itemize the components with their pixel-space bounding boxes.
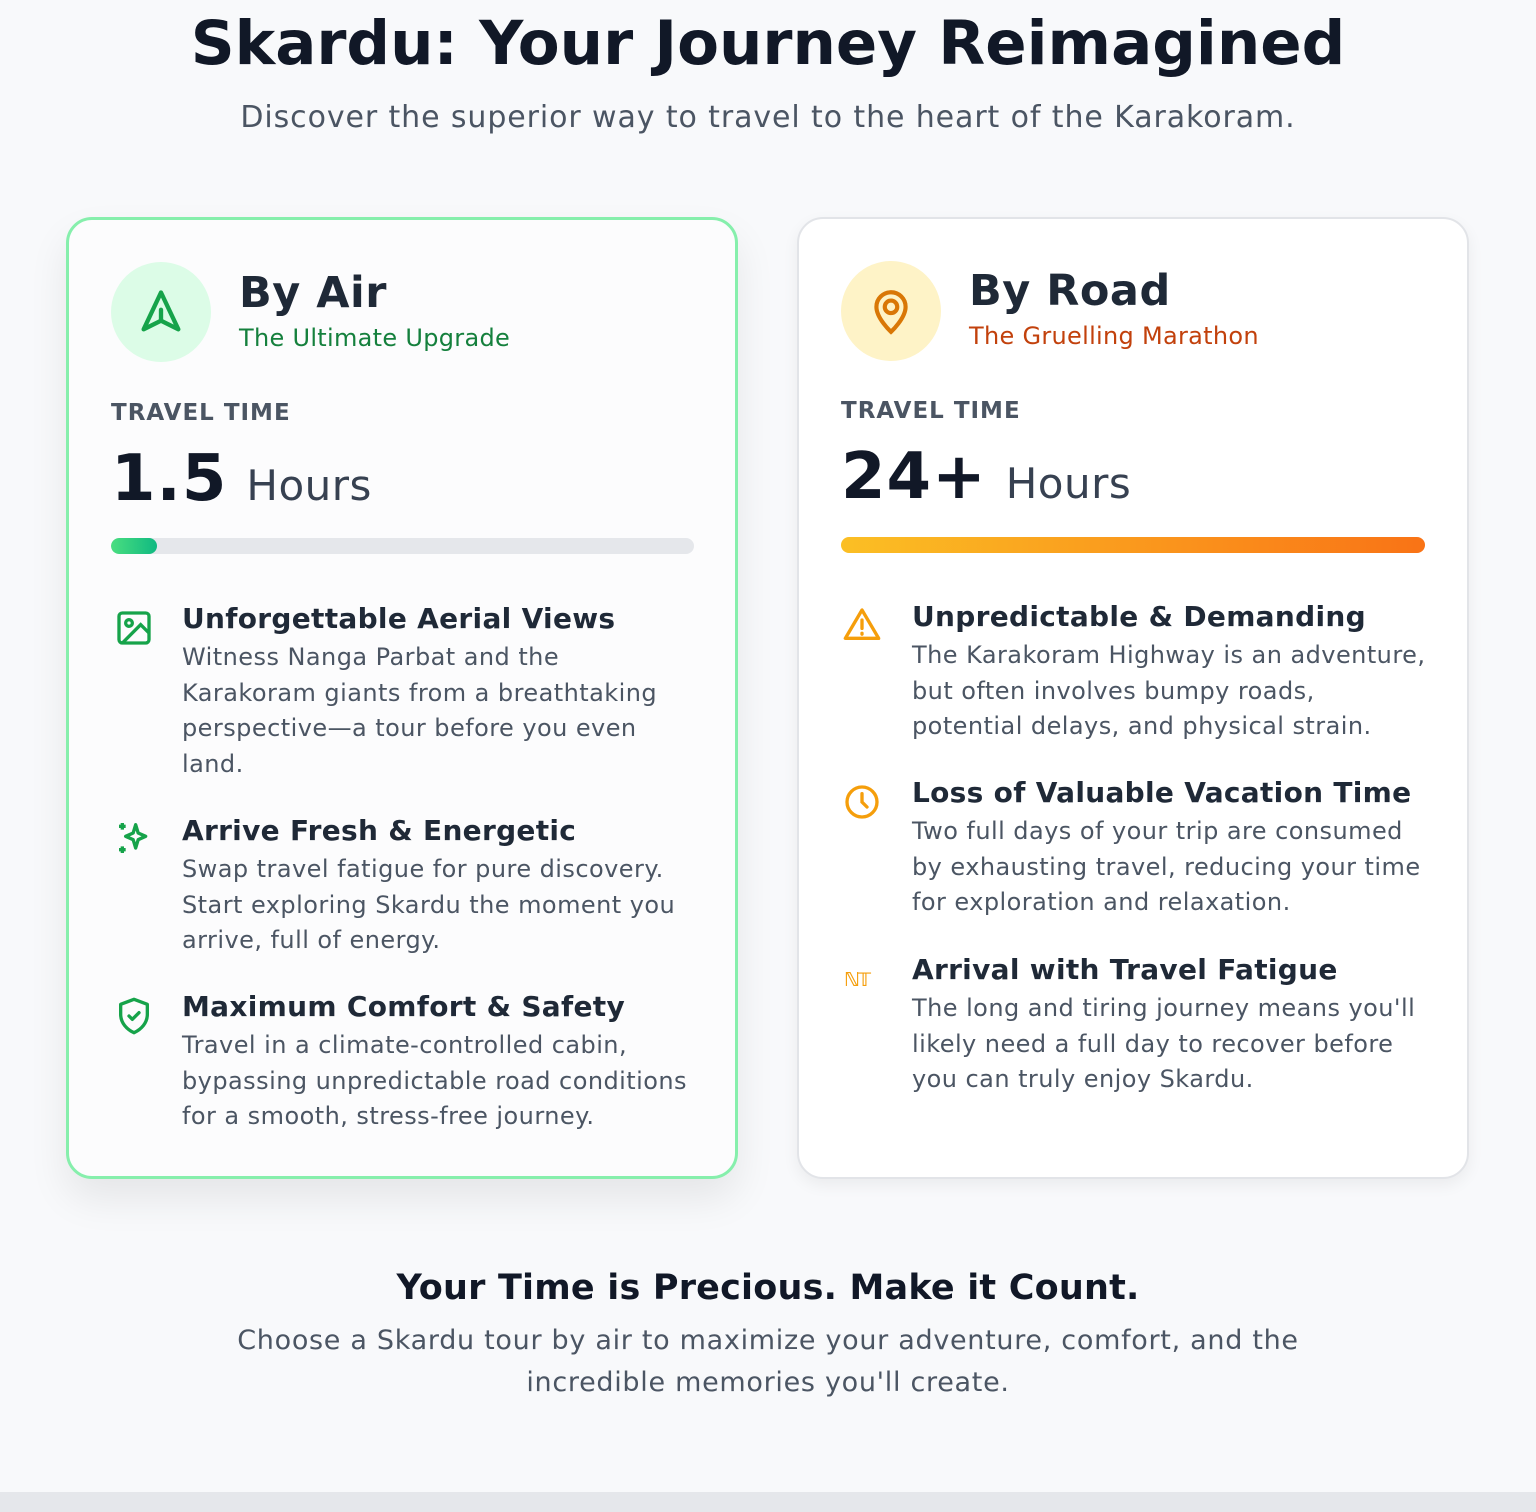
subtitle: Discover the superior way to travel to the heart of the Karakoram. (240, 100, 1296, 135)
subheading: The Ultimate Upgrade (239, 324, 510, 352)
heading: By Road (969, 266, 1171, 316)
feature: unpredictable: Unpredictable & Demanding (912, 600, 1366, 633)
icon: warning (844, 608, 880, 640)
footer heading: Your Time is Precious. Make it Count. (396, 1268, 1140, 1308)
feature: arrive fresh: Swap travel fatigue for pure discovery. Start exploring Skardu the moment you arrive, full of energy. (182, 855, 675, 954)
feature: arrive fresh: Arrive Fresh & Energetic (182, 814, 576, 847)
feature: aerial views: Witness Nanga Parbat and the Karakoram giants from a breathtaking perspective—a tour before you even land. (182, 643, 657, 778)
subheading: The Gruelling Marathon (969, 322, 1259, 350)
icon: map pin (841, 261, 941, 361)
stat: 1.5 Hours (111, 442, 372, 516)
feature: comfort: Maximum Comfort & Safety (182, 990, 625, 1023)
icon: navigation (111, 262, 211, 362)
icon: image (117, 611, 151, 645)
footer text: Choose a Skardu tour by air to maximize your adventure, comfort, and the incredible memories you'll create. (237, 1325, 1299, 1398)
feature: fatigue: The long and tiring journey means you'll likely need a full day to recover before you can truly enjoy Skardu. (912, 994, 1415, 1093)
heading: By Air (239, 268, 387, 318)
label: TRAVEL TIME (111, 400, 291, 426)
feature: comfort: Travel in a climate-controlled cabin, bypassing unpredictable road conditions for a smooth, stress-free journey. (182, 1031, 687, 1130)
feature: vacation time: Loss of Valuable Vacation Time (912, 776, 1411, 809)
feature: unpredictable: The Karakoram Highway is an adventure, but often involves bumpy roads, potential delays, and physical strain. (912, 641, 1425, 740)
icon: fatigue: ℕ𝕋 (844, 969, 869, 991)
progress bar (841, 537, 1425, 553)
icon: clock (845, 785, 879, 819)
feature: fatigue: Arrival with Travel Fatigue (912, 953, 1338, 986)
feature: aerial views: Unforgettable Aerial Views (182, 602, 615, 635)
icon: shield (119, 998, 149, 1034)
title: Skardu: Your Journey Reimagined (191, 8, 1345, 79)
panel: by air (66, 217, 738, 1179)
panel: by road (797, 217, 1469, 1179)
stat: 24+ Hours (841, 440, 1131, 514)
label: TRAVEL TIME (841, 398, 1021, 424)
progress bar (111, 538, 694, 554)
icon: sparkles (119, 823, 148, 853)
feature: vacation time: Two full days of your trip are consumed by exhausting travel, reducing your time for exploration and relaxation. (912, 817, 1421, 916)
